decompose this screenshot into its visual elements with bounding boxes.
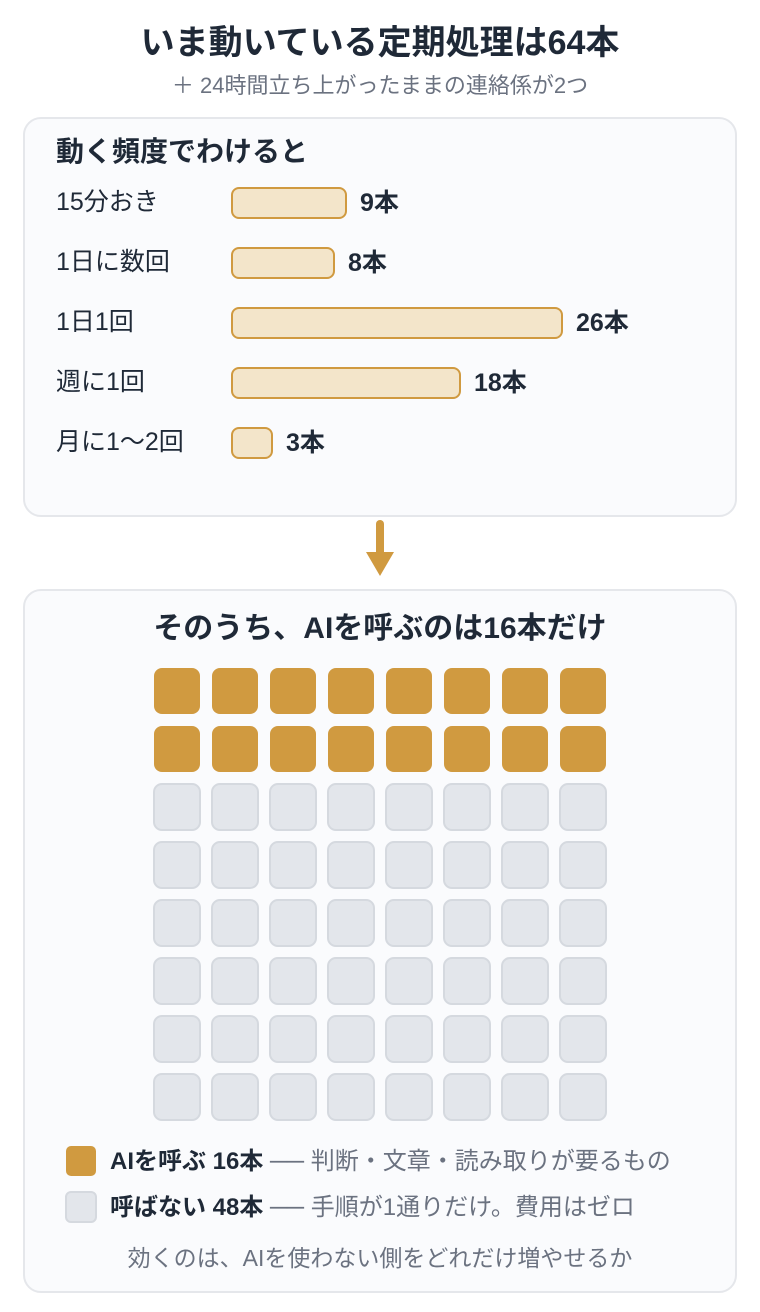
value: 9: 9本 [360,189,399,217]
panel: AI share [23,589,737,1293]
value: 26: 26本 [576,309,629,337]
arrow [366,520,394,576]
bar: every 15 minutes [231,187,347,219]
legend swatch: does not call AI [65,1191,97,1223]
legend swatch: calls AI [66,1146,96,1176]
bar: once a day [231,307,563,339]
value: 8: 8本 [348,249,387,277]
bar: once or twice a month [231,427,273,459]
title: いま動いている定期処理は64本 [141,24,619,62]
value: 3: 3本 [286,429,325,457]
frequency heading: 動く頻度でわけると [56,136,308,167]
AI share heading: そのうち、AIを呼ぶのは16本だけ [153,612,607,645]
panel: frequency breakdown [23,117,737,517]
row label: once a day: 1日1回 [56,308,134,336]
row label: once a week: 週に1回 [56,368,145,396]
waffle chart: 64 jobs [153,668,607,1121]
bar: once a week [231,367,461,399]
legend text: does not call AI: 呼ばない 48本 ── 手順が1通りだけ。費用はゼロ [110,1194,635,1221]
row label: every 15 minutes: 15分おき [56,188,159,216]
legend text: calls AI: AIを呼ぶ 16本 ── 判断・文章・読み取りが要るもの [110,1148,671,1175]
row label: once or twice a month: 月に1〜2回 [56,428,184,456]
row label: several times a day: 1日に数回 [56,248,170,276]
subtitle: ＋ 24時間立ち上がったままの連絡係が2つ [172,73,588,98]
value: 18: 18本 [474,369,527,397]
footer note: 効くのは、AIを使わない側をどれだけ増やせるか [128,1245,632,1271]
bar: several times a day [231,247,335,279]
